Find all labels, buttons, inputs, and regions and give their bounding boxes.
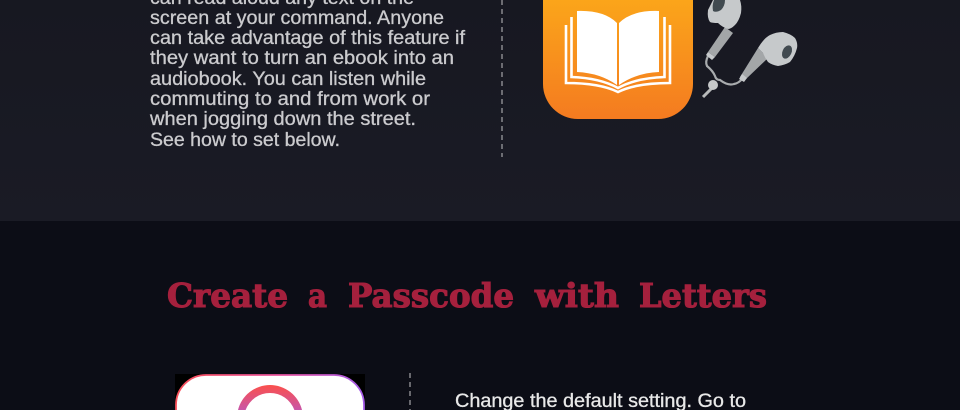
text block: speech feature description: commuting to and from work or	[150, 89, 431, 110]
text block: speech feature description: they want to turn an ebook into an	[150, 48, 454, 69]
icon: orange book app	[543, 0, 693, 119]
text block: speech feature description: audiobook. You can listen while	[150, 69, 426, 90]
title: with	[534, 276, 619, 315]
icon: passcode app	[175, 374, 365, 410]
title: Create	[167, 276, 288, 315]
icon: earphones	[703, 0, 797, 97]
title: Letters	[639, 276, 767, 315]
text block: speech feature description: can take advantage of this feature if	[150, 28, 466, 49]
text block: speech feature description: See how to set below.	[150, 130, 340, 151]
panel: passcode section	[0, 221, 960, 410]
title: a	[308, 276, 327, 315]
text block: speech feature description: when jogging down the street.	[149, 109, 416, 130]
text block: speech feature description	[149, 0, 466, 151]
title: Passcode	[348, 276, 514, 315]
panel: audiobook section	[0, 0, 960, 221]
text block: speech feature description: screen at your command. Anyone	[150, 8, 444, 29]
title	[167, 276, 767, 315]
